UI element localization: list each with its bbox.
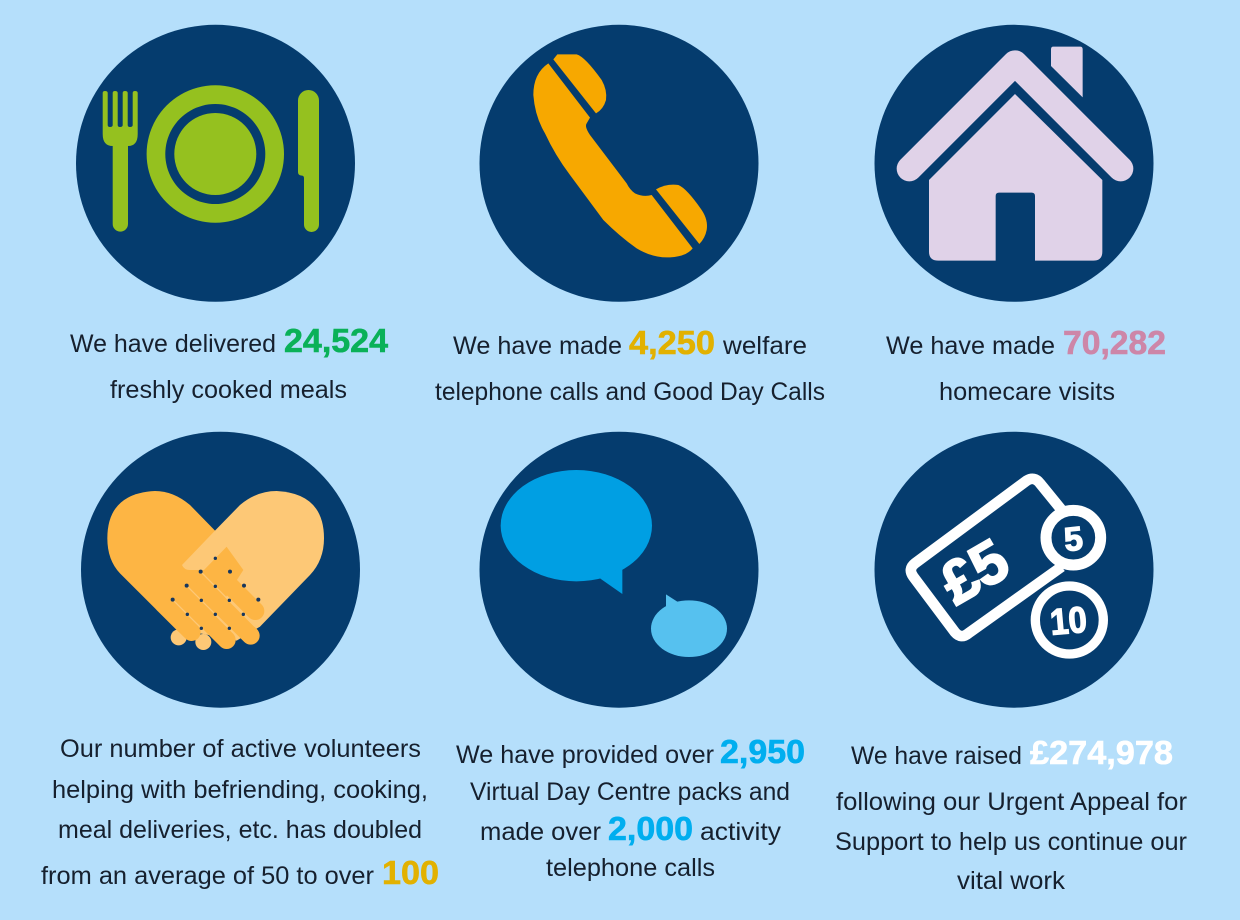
stat: telephone calls — [435, 324, 825, 406]
icon: clasped hands forming a heart — [81, 432, 360, 708]
stat: telephone calls: telephone calls and Good Day Calls — [435, 378, 825, 406]
stat: active volunteers — [41, 735, 439, 891]
stat: meals delivered — [70, 322, 389, 404]
stat: homecare visits — [886, 324, 1166, 406]
stat: Virtual Day Centre packs: 2,000 — [608, 810, 693, 847]
stat: money raised: following our Urgent Appeal for — [836, 788, 1187, 816]
stat: meals delivered: freshly cooked meals — [110, 376, 347, 404]
stat: Virtual Day Centre packs: 2,950 — [720, 733, 805, 770]
icon: house — [874, 25, 1154, 302]
stat: Virtual Day Centre packs: activity — [700, 818, 782, 846]
stat: meals delivered: We have delivered — [70, 330, 276, 358]
stat: money raised — [835, 734, 1187, 895]
icon: telephone handset — [480, 25, 758, 302]
icon: banknote and coins: £5 — [929, 526, 1020, 617]
stat: telephone calls: We have made — [453, 332, 622, 360]
stat: Virtual Day Centre packs — [456, 733, 805, 882]
icon: speech bubbles — [480, 432, 758, 708]
stat: Virtual Day Centre packs: made over — [480, 818, 601, 846]
stat: homecare visits: 70,282 — [1063, 324, 1166, 361]
stat: Virtual Day Centre packs: Virtual Day Centre packs and — [470, 778, 790, 806]
icon: plate with fork and knife — [76, 25, 355, 302]
icon: banknote and coins: 5 — [1062, 520, 1085, 559]
stat: active volunteers: meal deliveries, etc. has doubled — [58, 816, 422, 844]
stat: active volunteers: helping with befriending, cooking, — [52, 776, 428, 804]
icon: banknote and coins: 10 — [1048, 599, 1088, 643]
stat: meals delivered: 24,524 — [284, 322, 389, 359]
stat: active volunteers: from an average of 50 to over — [41, 862, 374, 890]
stat: telephone calls: 4,250 — [629, 324, 715, 361]
stat: Virtual Day Centre packs: We have provided over — [456, 741, 714, 769]
stat: active volunteers: 100 — [382, 854, 439, 891]
stat: homecare visits: homecare visits — [939, 378, 1115, 406]
stat: money raised: £274,978 — [1030, 734, 1173, 771]
stat: Virtual Day Centre packs: telephone calls — [546, 854, 715, 882]
stat: money raised: We have raised — [851, 742, 1022, 770]
stat: homecare visits: We have made — [886, 332, 1055, 360]
stat: active volunteers: Our number of active volunteers — [60, 735, 421, 763]
stat: money raised: Support to help us continue our — [835, 828, 1187, 856]
icon: banknote and coins — [874, 432, 1154, 708]
stat: money raised: vital work — [957, 867, 1066, 895]
stat: telephone calls: welfare — [722, 332, 807, 360]
